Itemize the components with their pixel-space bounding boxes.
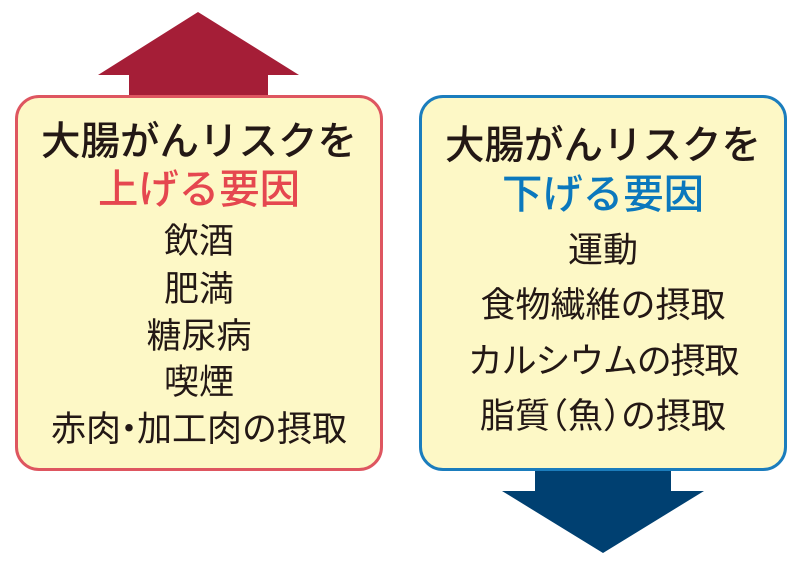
panel: factors lowering risk bbox=[419, 95, 787, 471]
text: dietary fiber: 食物繊維の摂取 bbox=[480, 286, 726, 325]
text: drinking: 飲酒 bbox=[164, 222, 234, 261]
arrow: down bbox=[502, 471, 704, 553]
text: obesity: 肥満 bbox=[164, 270, 234, 309]
text: exercise: 運動 bbox=[568, 231, 638, 270]
text: diabetes: 糖尿病 bbox=[146, 317, 252, 356]
heading: raising risk line 1: 大腸がんリスクを bbox=[41, 120, 357, 164]
heading: raising factors: 上げる要因 bbox=[98, 166, 300, 212]
text: calcium: カルシウムの摂取 bbox=[468, 342, 738, 381]
arrow: up bbox=[98, 12, 299, 95]
text: fish fat: 脂質（魚）の摂取 bbox=[480, 397, 726, 436]
panel: factors raising risk bbox=[15, 95, 383, 471]
heading: lowering factors: 下げる要因 bbox=[502, 171, 704, 217]
text: red and processed meat: 赤肉・加工肉の摂取 bbox=[51, 410, 347, 449]
text: smoking: 喫煙 bbox=[164, 363, 234, 402]
heading: lowering risk line 1: 大腸がんリスクを bbox=[445, 124, 761, 168]
